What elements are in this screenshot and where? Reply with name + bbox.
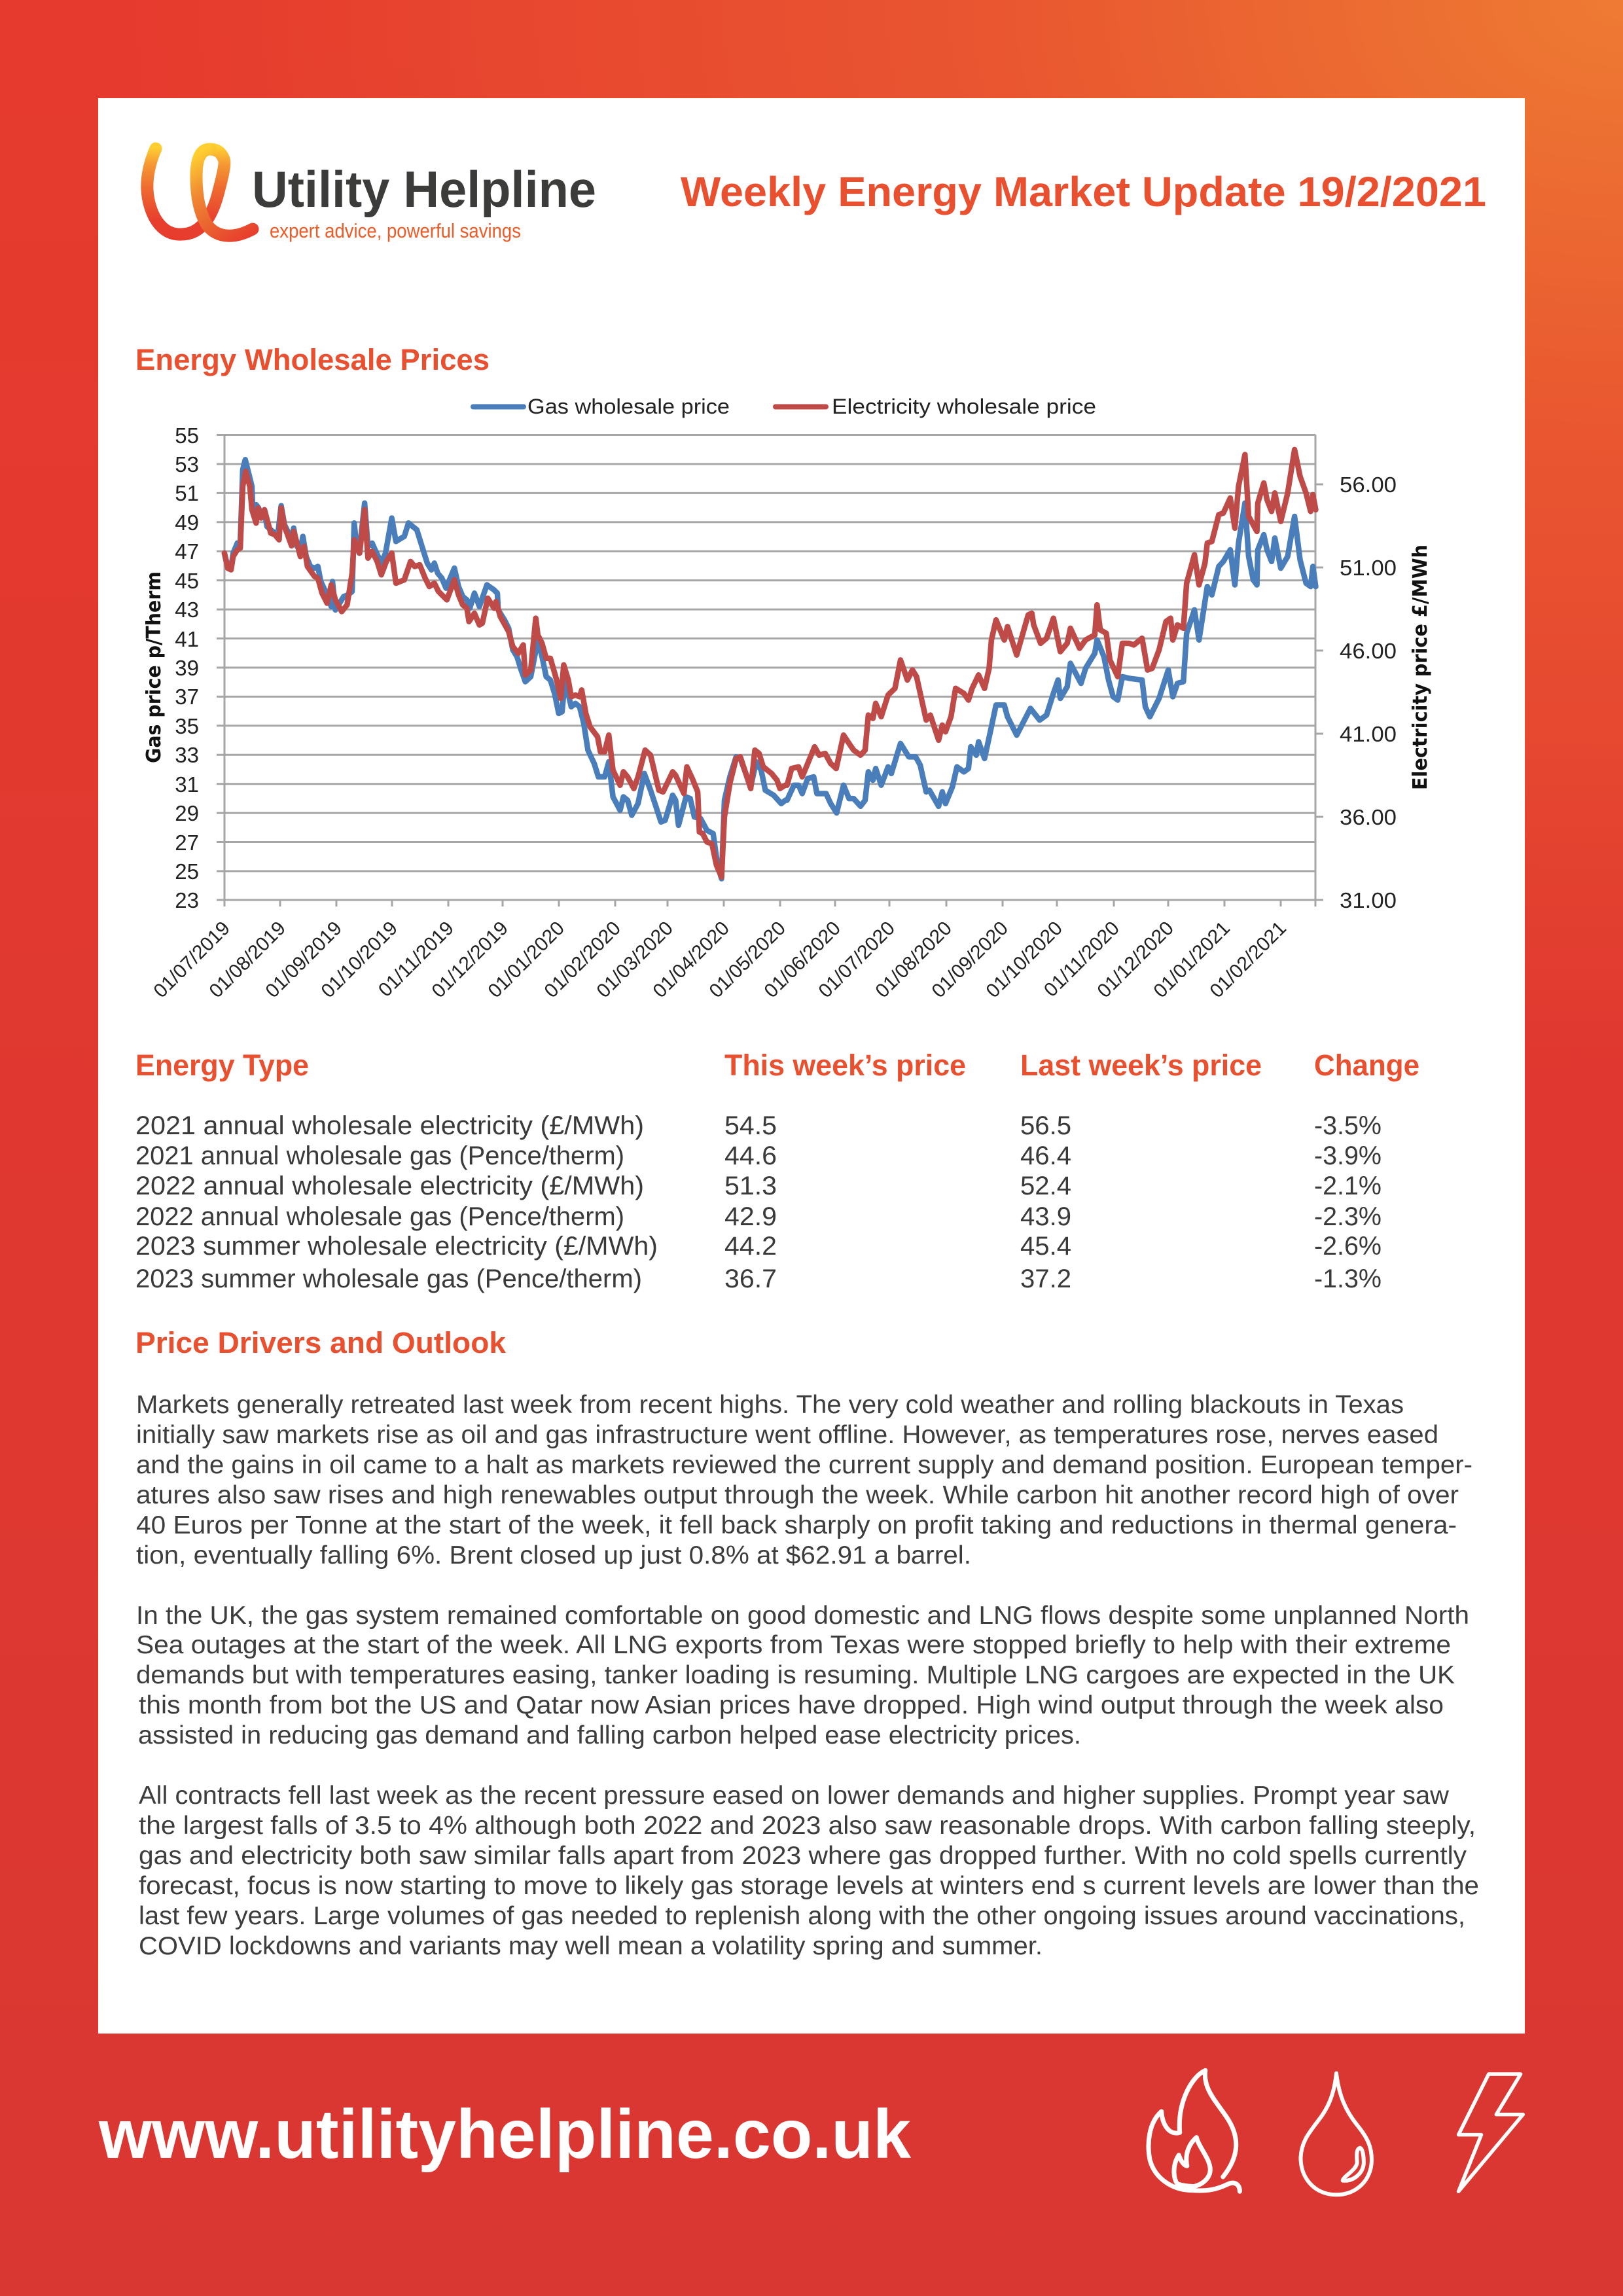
- footer website URL: www.utilityhelpline.co.uk: [98, 2096, 912, 2173]
- left axis labels: 55: [175, 423, 199, 448]
- icon: lightning bolt: [1459, 2074, 1523, 2191]
- row: 2021 gas: -3.9%: [1314, 1141, 1382, 1170]
- row: 2022 electricity: 2022 annual wholesale electricity (£/MWh): [135, 1172, 644, 1200]
- x axis date labels: 01/01/2021: [1149, 918, 1234, 1002]
- row: 2023 summer gas: [135, 1265, 1382, 1293]
- row: 2021 electricity: [135, 1111, 1382, 1140]
- text block: market summary: [136, 1391, 1472, 1570]
- row: 2022 electricity: 51.3: [724, 1172, 777, 1200]
- left axis labels: 35: [175, 714, 199, 738]
- logo wordmark: Utility Helpline: [252, 160, 596, 218]
- row: 2023 summer gas: 2023 summer wholesale gas (Pence/therm): [135, 1265, 642, 1293]
- logo swoosh: [147, 149, 253, 236]
- panel: white content sheet: [98, 98, 1525, 2034]
- row: 2021 gas: 2021 annual wholesale gas (Pence/therm): [135, 1141, 624, 1170]
- left axis labels: 45: [175, 569, 199, 593]
- table header: Energy Type: [135, 1049, 309, 1082]
- x axis date labels: 01/08/2020: [871, 918, 956, 1002]
- right axis labels: 56.00: [1340, 473, 1397, 497]
- x axis date labels: 01/12/2019: [427, 918, 512, 1002]
- left axis labels: 51: [175, 481, 199, 505]
- text block: contracts outlook: COVID lockdowns and variants may well mean a volatility spring and summer.: [139, 1932, 1043, 1960]
- icon: water drop: [1300, 2073, 1372, 2195]
- text block: market summary: atures also saw rises and high renewables output through the week. While carbon hit another record high of over: [136, 1481, 1459, 1509]
- text block: UK gas system: [136, 1602, 1469, 1749]
- text block: contracts outlook: gas and electricity both saw similar falls apart from 2023 where gas dropped further. With no cold spells currently: [139, 1842, 1467, 1870]
- right axis labels: 46.00: [1340, 639, 1397, 663]
- row: 2022 gas: -2.3%: [1314, 1202, 1382, 1231]
- x axis date labels: 01/11/2020: [1040, 918, 1124, 1001]
- row: 2021 gas: 46.4: [1020, 1141, 1071, 1170]
- row: 2022 gas: 43.9: [1020, 1202, 1071, 1231]
- row: 2022 gas: 2022 annual wholesale gas (Pence/therm): [135, 1202, 624, 1231]
- heading: Energy Wholesale Prices: Energy Wholesale Prices: [135, 343, 490, 376]
- table header: Last week’s price: [1020, 1049, 1262, 1082]
- text block: UK gas system: this month from bot the US and Qatar now Asian prices have dropped. High wind output through the week also: [139, 1691, 1444, 1719]
- text block: market summary: initially saw markets rise as oil and gas infrastructure went offline. However, as temperatures rose, nerves eased: [136, 1421, 1438, 1449]
- series: electricity wholesale price: [224, 450, 1315, 877]
- x axis date labels: 01/01/2020: [484, 918, 569, 1002]
- text block: UK gas system: In the UK, the gas system remained comfortable on good domestic and LNG flows despite some unplanned North: [136, 1602, 1469, 1630]
- x axis date labels: 01/07/2019: [149, 918, 234, 1002]
- chart legend: Gas wholesale price: [527, 395, 730, 418]
- right axis labels: 41.00: [1340, 722, 1397, 746]
- right axis title: Electricity price £/MWh: [1409, 545, 1432, 790]
- x axis date labels: 01/11/2019: [374, 918, 458, 1001]
- right axis labels: 36.00: [1340, 805, 1397, 829]
- right axis labels: 51.00: [1340, 556, 1397, 580]
- right axis labels: [1340, 473, 1397, 912]
- row: 2021 electricity: 56.5: [1020, 1111, 1071, 1140]
- left axis labels: 41: [175, 627, 199, 651]
- logo strapline: expert advice, powerful savings: [270, 219, 521, 242]
- x axis date labels: 01/05/2020: [705, 918, 790, 1002]
- left axis labels: 33: [175, 743, 199, 767]
- text block: contracts outlook: All contracts fell last week as the recent pressure eased on lower demands and higher supplies. Prompt year saw: [139, 1782, 1450, 1810]
- left axis labels: 23: [175, 888, 199, 912]
- chart legend: [473, 395, 1096, 418]
- row: 2022 electricity: [135, 1172, 1382, 1200]
- text block: market summary: Markets generally retreated last week from recent highs. The very cold weather and rolling blackouts in Texas: [136, 1391, 1404, 1419]
- left axis labels: 25: [175, 859, 199, 884]
- row: 2023 summer electricity: -2.6%: [1314, 1232, 1382, 1261]
- text block: UK gas system: demands but with temperatures easing, tanker loading is resuming. Multiple LNG cargoes are expected in the UK: [136, 1661, 1455, 1689]
- right axis labels: 31.00: [1340, 888, 1397, 912]
- row: 2022 gas: [135, 1202, 1382, 1231]
- left axis labels: [175, 423, 199, 912]
- x axis date labels: 01/06/2020: [760, 918, 845, 1002]
- text block: UK gas system: assisted in reducing gas demand and falling carbon helped ease electricity prices.: [138, 1721, 1081, 1749]
- text block: market summary: and the gains in oil came to a halt as markets reviewed the current supply and demand position. European temper-: [136, 1451, 1472, 1479]
- x axis date labels: 01/12/2020: [1093, 918, 1178, 1002]
- row: 2021 electricity: -3.5%: [1314, 1111, 1382, 1140]
- row: 2021 electricity: 54.5: [724, 1111, 777, 1140]
- text block: contracts outlook: [139, 1782, 1479, 1960]
- row: 2021 gas: [135, 1141, 1382, 1170]
- row: 2022 electricity: -2.1%: [1314, 1172, 1382, 1200]
- logo: Utility Helpline: [147, 149, 596, 242]
- series: gas wholesale price: [224, 459, 1315, 879]
- text block: UK gas system: Sea outages at the start of the week. All LNG exports from Texas were stopped briefly to help with their extreme: [136, 1631, 1451, 1659]
- left axis labels: 27: [175, 831, 199, 855]
- icon: flame: [1149, 2070, 1240, 2191]
- row: 2022 electricity: 52.4: [1020, 1172, 1071, 1200]
- x axis date labels: 01/02/2020: [540, 918, 625, 1002]
- x axis date labels: 01/07/2020: [814, 918, 899, 1002]
- row: 2023 summer electricity: [135, 1232, 1382, 1261]
- x axis date labels: 01/09/2019: [261, 918, 346, 1002]
- row: 2023 summer electricity: 2023 summer wholesale electricity (£/MWh): [135, 1232, 658, 1261]
- left axis labels: 37: [175, 685, 199, 709]
- row: 2023 summer gas: 36.7: [724, 1265, 777, 1293]
- x axis date labels: 01/03/2020: [592, 918, 677, 1002]
- text block: contracts outlook: forecast, focus is now starting to move to likely gas storage levels at winters end s current levels are lower than the: [139, 1872, 1479, 1900]
- x axis date labels: 01/10/2019: [317, 918, 402, 1002]
- line chart: gas and electricity wholesale prices: [143, 395, 1432, 1002]
- text block: market summary: tion, eventually falling 6%. Brent closed up just 0.8% at $62.91 a barrel.: [136, 1541, 971, 1570]
- table: energy prices: [135, 1049, 1419, 1293]
- row: 2023 summer gas: 37.2: [1020, 1265, 1071, 1293]
- text block: contracts outlook: the largest falls of 3.5 to 4% although both 2022 and 2023 also saw reasonable drops. With carbon falling steeply,: [139, 1812, 1476, 1840]
- x axis date labels: [149, 918, 1291, 1002]
- chart legend: Electricity wholesale price: [832, 395, 1096, 418]
- left axis labels: 53: [175, 452, 199, 476]
- title: Weekly Energy Market Update 19/2/2021: [681, 168, 1486, 215]
- table header: Change: [1314, 1049, 1419, 1082]
- row: 2023 summer electricity: 44.2: [724, 1232, 777, 1261]
- table header: This week’s price: [724, 1049, 966, 1082]
- x axis date labels: 01/04/2020: [649, 918, 734, 1002]
- left axis labels: 29: [175, 801, 199, 825]
- row: 2023 summer electricity: 45.4: [1020, 1232, 1071, 1261]
- row: 2021 gas: 44.6: [724, 1141, 777, 1170]
- row: 2021 electricity: 2021 annual wholesale electricity (£/MWh): [135, 1111, 644, 1140]
- left axis labels: 43: [175, 598, 199, 622]
- left axis labels: 47: [175, 539, 199, 564]
- row: 2022 gas: 42.9: [724, 1202, 777, 1231]
- left axis title: Gas price p/Therm: [143, 571, 166, 763]
- heading: Price Drivers and Outlook: Price Drivers and Outlook: [135, 1326, 507, 1359]
- x axis date labels: 01/08/2019: [205, 918, 290, 1002]
- row: 2023 summer gas: -1.3%: [1314, 1265, 1382, 1293]
- x axis date labels: 01/02/2021: [1205, 918, 1291, 1002]
- left axis labels: 31: [175, 772, 199, 797]
- left axis labels: 49: [175, 511, 199, 535]
- left axis labels: 39: [175, 656, 199, 680]
- table header: [135, 1049, 1419, 1082]
- text block: contracts outlook: last few years. Large volumes of gas needed to replenish along with the other ongoing issues around vaccinations,: [139, 1902, 1465, 1930]
- x axis date labels: 01/09/2020: [927, 918, 1012, 1002]
- text block: market summary: 40 Euros per Tonne at the start of the week, it fell back sharply on profit taking and reductions in thermal genera-: [136, 1511, 1457, 1539]
- x axis date labels: 01/10/2020: [982, 918, 1067, 1002]
